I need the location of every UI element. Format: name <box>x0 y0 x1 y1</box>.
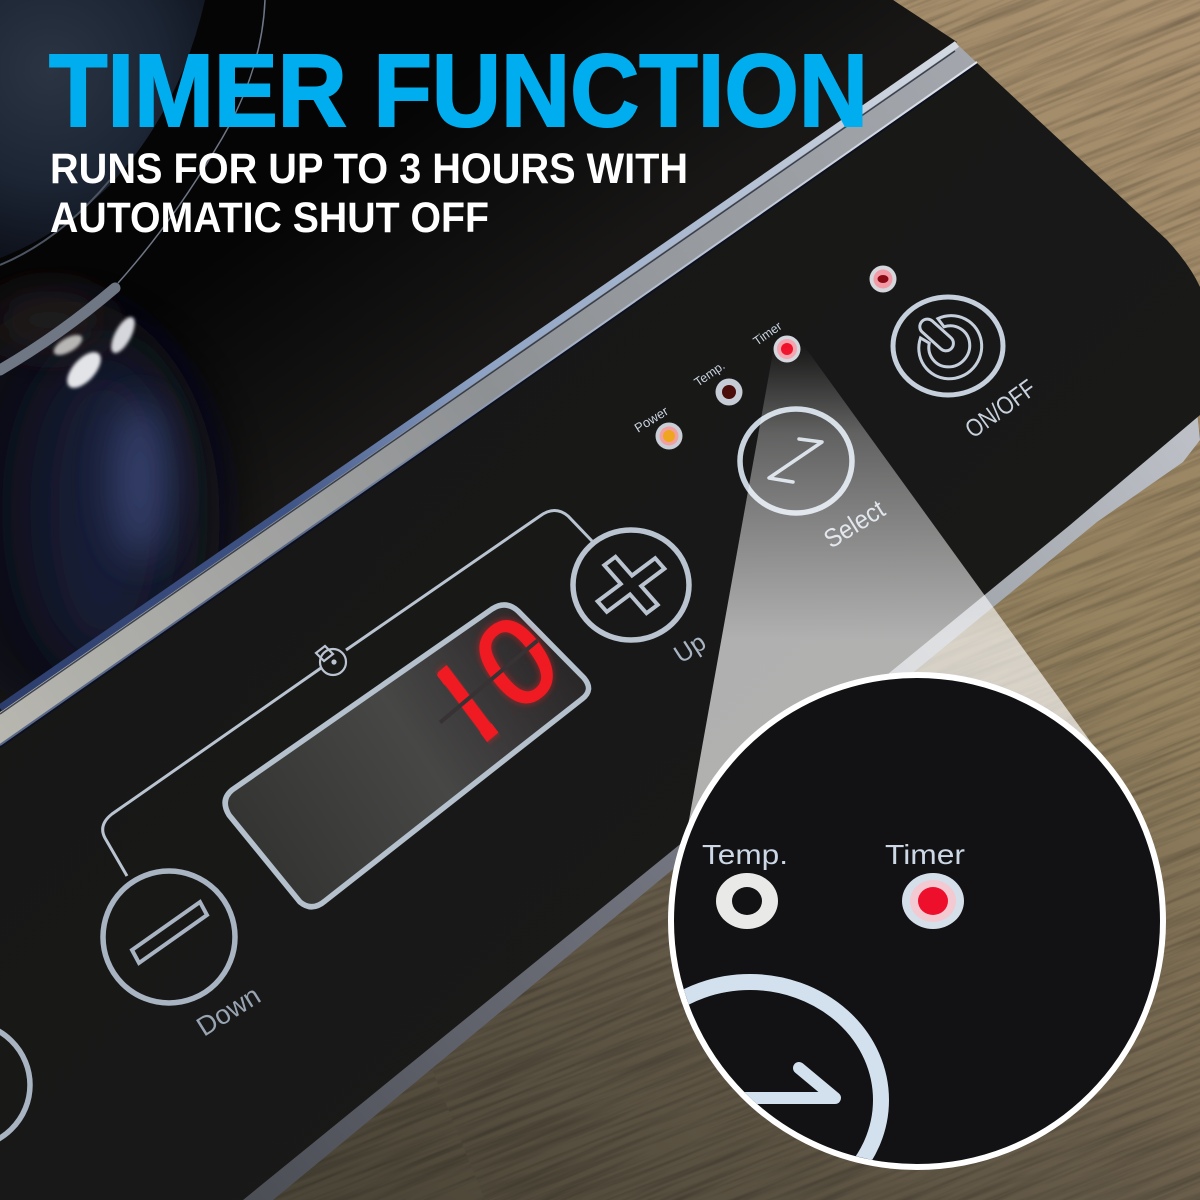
lock connector line <box>103 510 592 876</box>
indicator lights <box>656 266 896 450</box>
select button <box>740 409 852 513</box>
label: down: Down <box>191 980 266 1042</box>
control panel printed graphics <box>0 297 1003 1148</box>
pot thin rim curve <box>118 0 265 283</box>
label: power: Power <box>632 403 671 436</box>
subtitle: RUNS FOR UP TO 3 HOURS WITH <box>50 145 688 193</box>
label: temp: Temp. <box>692 358 728 389</box>
label: timer: Timer <box>751 319 785 348</box>
on/off light <box>870 266 896 292</box>
label: on/off: ON/OFF <box>960 374 1041 444</box>
display window <box>225 605 589 907</box>
navy pot wall <box>30 350 180 670</box>
enlarged temp label: Temp. <box>702 839 788 870</box>
lock icon <box>316 646 346 675</box>
temp light <box>716 378 742 406</box>
LED digit readout: 10 <box>401 588 582 780</box>
enlarged temp light <box>716 873 778 929</box>
subtitle: AUTOMATIC SHUT OFF <box>50 194 489 242</box>
silver divider band <box>0 44 977 747</box>
title: TIMER FUNCTION <box>49 33 868 148</box>
panel labels <box>191 319 1041 1042</box>
down button <box>103 871 235 1003</box>
cooktop lower edge strip <box>243 412 1200 1200</box>
enlarged timer light <box>902 873 964 929</box>
enlarged timer label: Timer <box>885 839 965 870</box>
magnifier circle callout <box>668 672 1166 1170</box>
power light <box>656 422 682 450</box>
label: select: Select <box>818 493 891 554</box>
pot highlights <box>51 314 139 394</box>
partial button at left edge <box>0 1022 30 1148</box>
magnifier light cone <box>680 343 1140 870</box>
burner area with pot reflection <box>0 0 960 740</box>
up button <box>573 530 689 640</box>
enlarged select button <box>684 974 889 1160</box>
subtitle <box>50 145 688 242</box>
timer light <box>774 336 800 362</box>
dark pot surroundings <box>0 329 230 687</box>
brown area under rim <box>0 290 110 350</box>
LED digit readout <box>434 614 558 746</box>
pot inner curve <box>0 180 110 265</box>
pot gray rim band <box>0 288 115 370</box>
label: up: Up <box>669 628 711 669</box>
LED digit readout: 10 <box>401 588 582 780</box>
on/off button <box>893 297 1003 395</box>
blue pot shine <box>112 400 168 560</box>
pot body <box>0 0 205 258</box>
